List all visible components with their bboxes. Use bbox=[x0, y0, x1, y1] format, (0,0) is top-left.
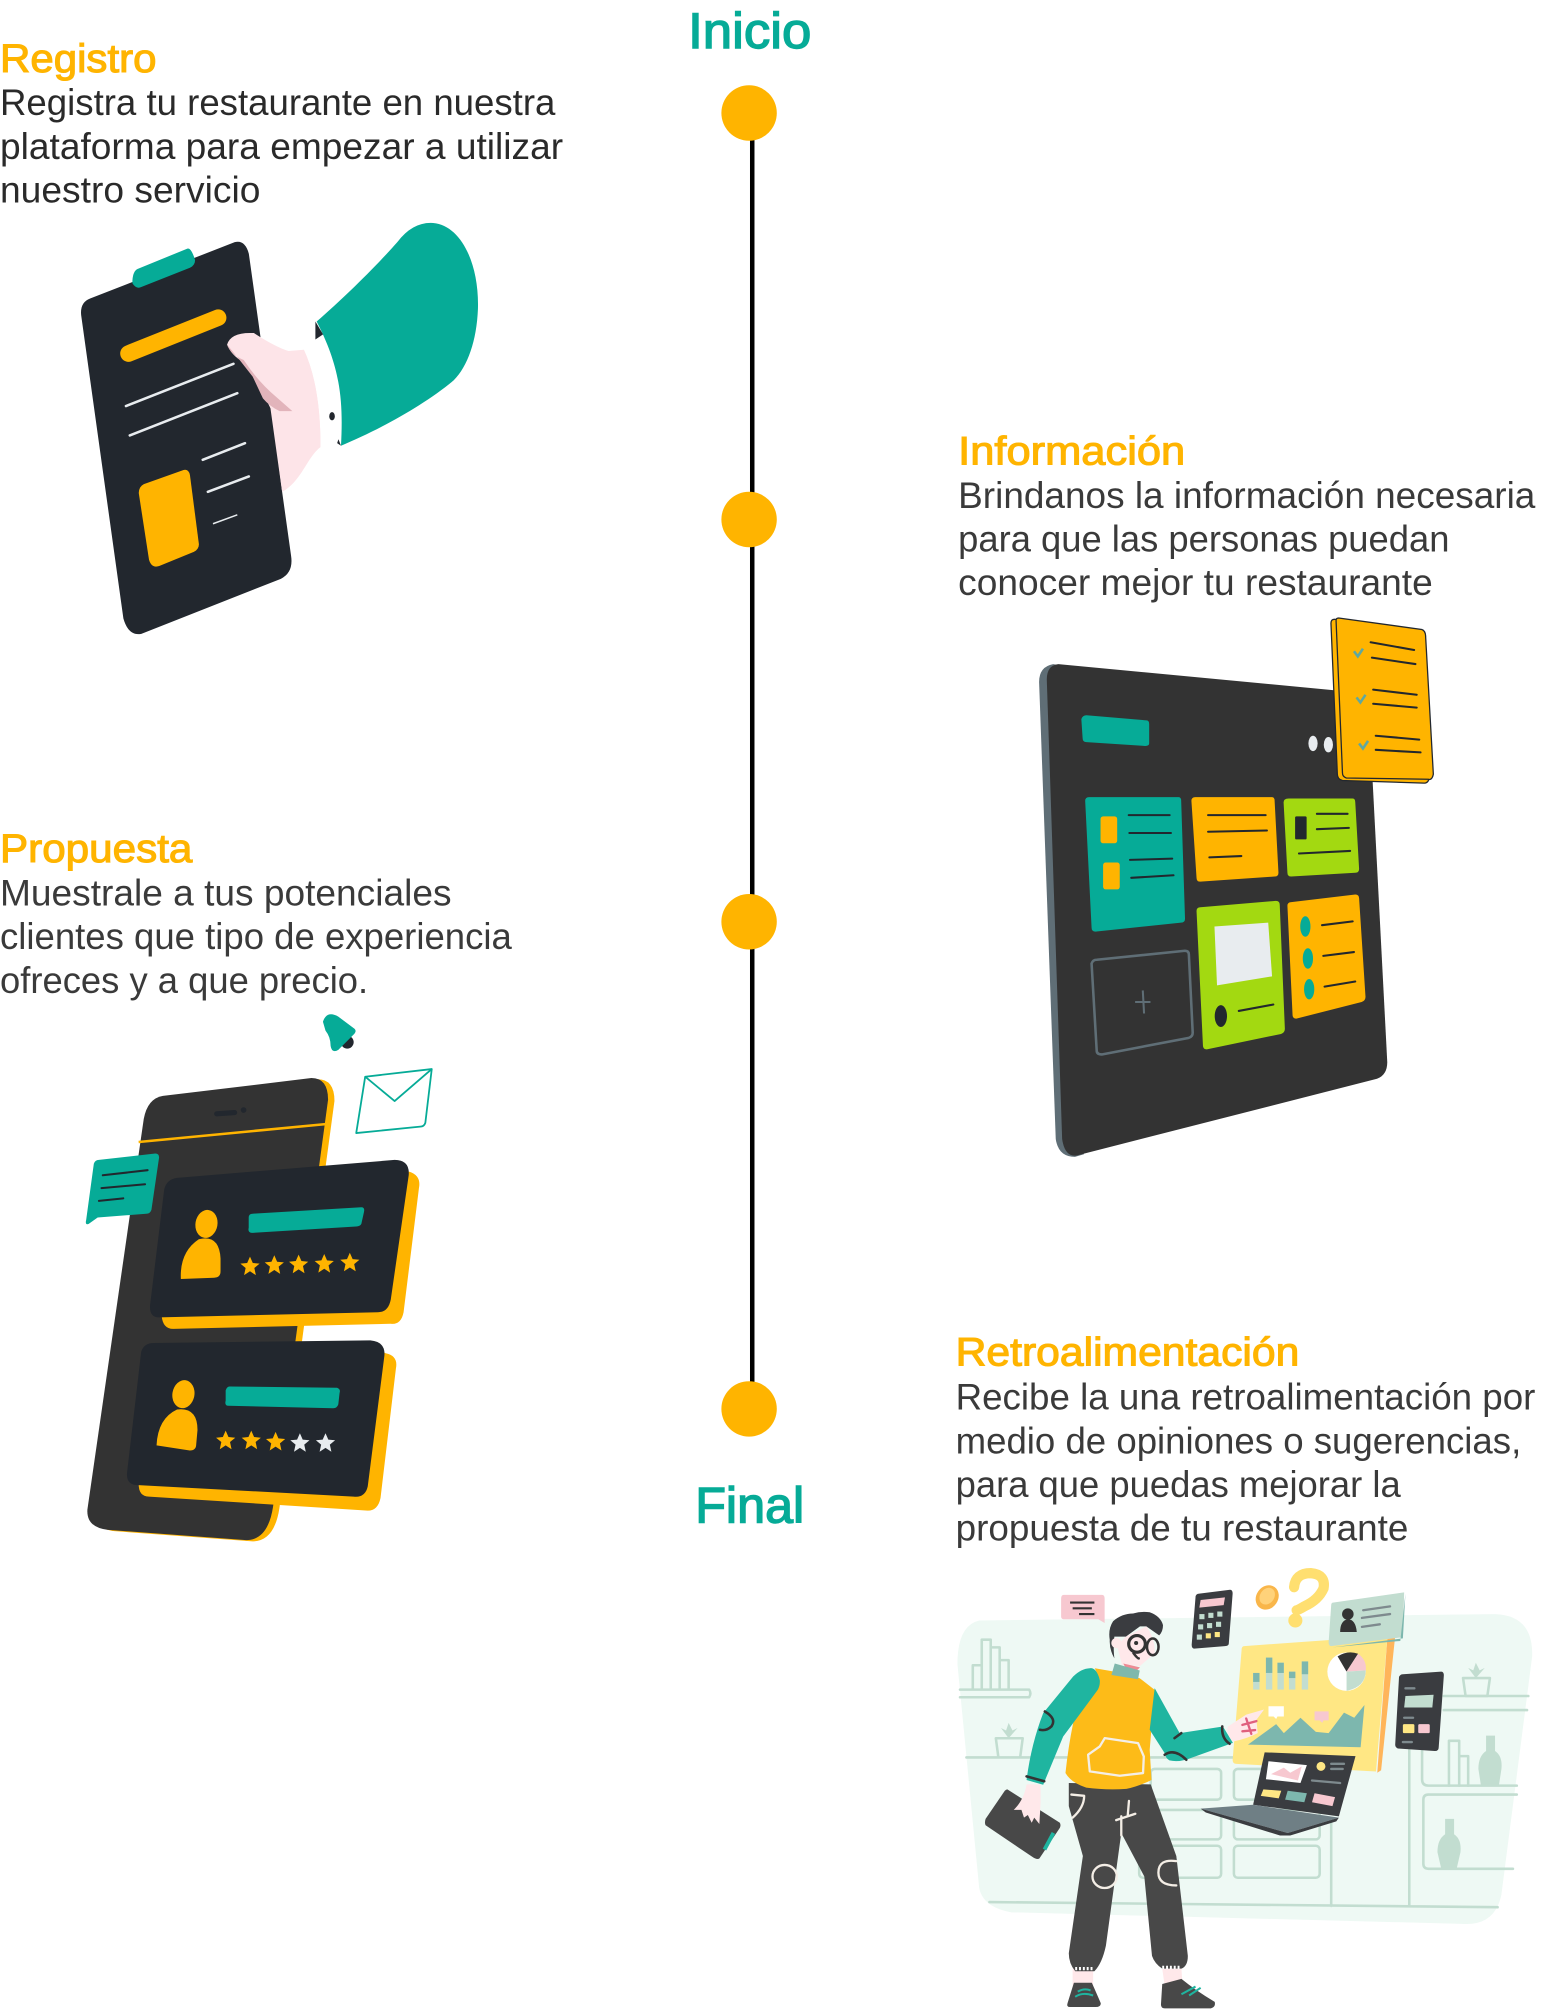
text block: Registro: Registro bbox=[0, 37, 156, 81]
icon: profile card bbox=[1329, 1592, 1405, 1647]
review card: three stars bbox=[127, 1340, 396, 1511]
text block: Registro: nuestro servicio bbox=[0, 169, 260, 211]
text block: Información bbox=[958, 429, 1536, 603]
text block: Propuesta: Propuesta bbox=[0, 827, 193, 871]
text block: Propuesta bbox=[0, 827, 512, 1001]
room background bbox=[957, 1614, 1532, 1924]
text block: Retroalimentación: para que puedas mejorar la bbox=[956, 1463, 1401, 1505]
icon: phone panel bbox=[1395, 1672, 1444, 1751]
text block: Propuesta: ofreces y a que precio. bbox=[0, 959, 368, 1001]
figure: upper body bbox=[1027, 1612, 1264, 1789]
text block: Información: Brindanos la información necesaria bbox=[958, 474, 1536, 516]
icon: chat bubble bbox=[86, 1154, 159, 1224]
heading: Inicio: Inicio bbox=[688, 3, 811, 59]
text block: Retroalimentación: Retroalimentación bbox=[956, 1330, 1299, 1374]
icon: dashboard tablet with checklist bbox=[1039, 618, 1433, 1157]
text block: Propuesta: Muestrale a tus potenciales bbox=[0, 872, 452, 914]
text block: Registro bbox=[0, 37, 563, 211]
text block: Registro: Registra tu restaurante en nuestra bbox=[0, 81, 556, 123]
icon: laptop bbox=[1201, 1752, 1356, 1836]
icon: clipboard held by hand bbox=[81, 223, 478, 634]
illustration: person reviewing data bbox=[957, 1573, 1532, 2008]
icon: bell bbox=[323, 1014, 356, 1051]
review card: five stars bbox=[150, 1160, 419, 1329]
text block: Retroalimentación: medio de opiniones o sugerencias, bbox=[956, 1419, 1521, 1461]
text block: Retroalimentación: propuesta de tu restaurante bbox=[956, 1507, 1408, 1549]
icon: calculator bbox=[1192, 1590, 1233, 1649]
icon: chat bubble pink bbox=[1061, 1595, 1105, 1623]
timeline node: Información bbox=[721, 492, 777, 547]
text block: Información: Información bbox=[958, 429, 1185, 473]
icon: phone with review cards bbox=[86, 1014, 432, 1541]
text block: Retroalimentación bbox=[956, 1330, 1535, 1549]
text block: Retroalimentación: Recibe la una retroalimentación por bbox=[956, 1376, 1535, 1418]
icon: question mark bbox=[1288, 1573, 1324, 1628]
figure: person bbox=[985, 1612, 1264, 2008]
timeline bbox=[721, 85, 777, 1437]
heading: Final: Final bbox=[695, 1477, 804, 1533]
text block: Información: para que las personas puedan bbox=[958, 518, 1449, 560]
text block: Propuesta: clientes que tipo de experiencia bbox=[0, 915, 512, 957]
text block: Información: conocer mejor tu restaurante bbox=[958, 561, 1433, 603]
icon: coin bbox=[1251, 1581, 1283, 1614]
timeline node: Propuesta bbox=[721, 894, 777, 949]
icon: chart board bbox=[1233, 1636, 1395, 1773]
timeline node: Registro bbox=[721, 85, 777, 141]
icon: envelope bbox=[356, 1069, 432, 1133]
text block: Registro: plataforma para empezar a utilizar bbox=[0, 125, 563, 167]
timeline node: Retroalimentación bbox=[721, 1381, 777, 1437]
